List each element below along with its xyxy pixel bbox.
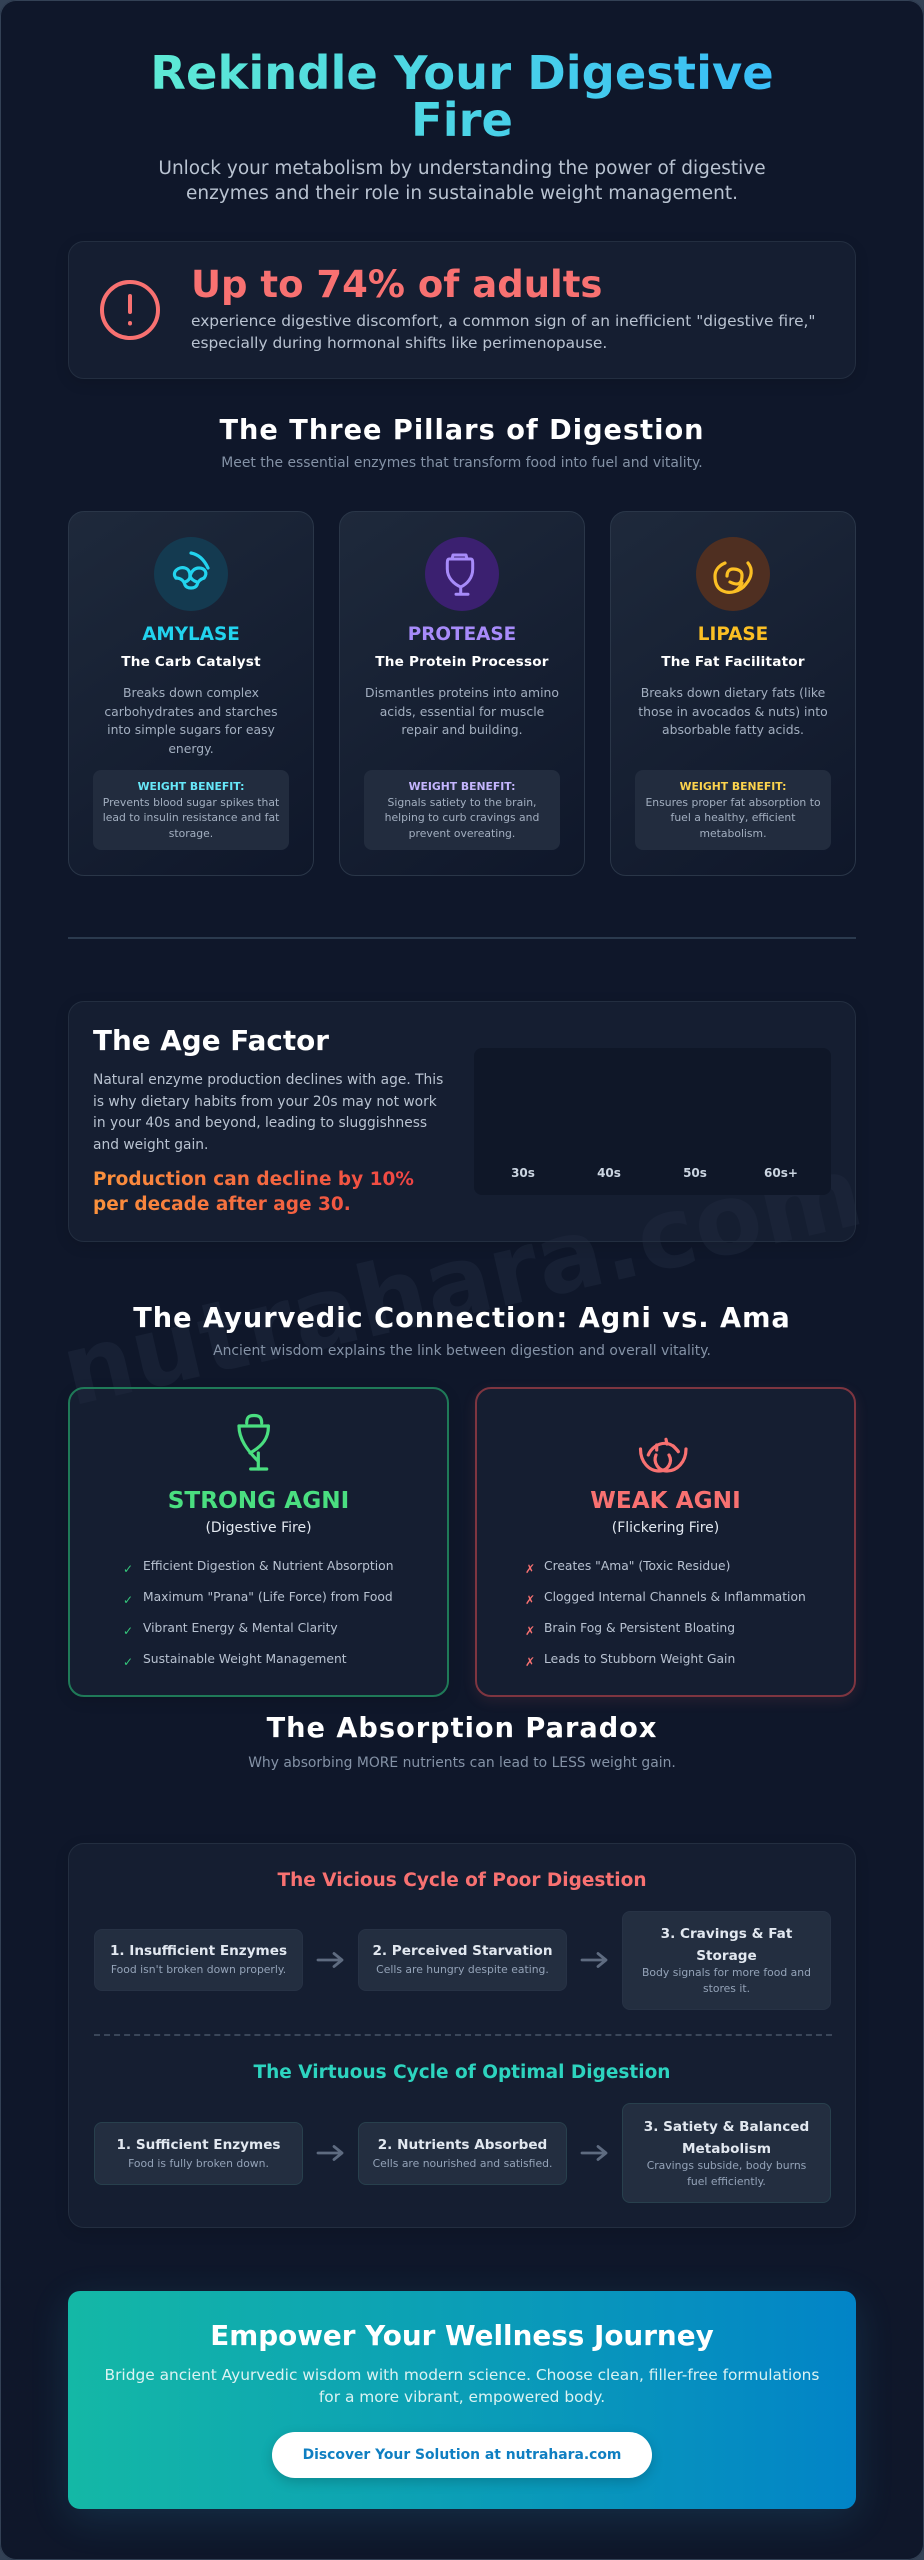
chart: enzyme decline by age: 30s bbox=[511, 1166, 535, 1180]
enzyme description: Breaks down complex bbox=[123, 685, 259, 700]
step: perceived starvation: Cells are hungry despite eating. bbox=[376, 1963, 549, 1976]
weight benefit: Ensures proper fat absorption to bbox=[645, 796, 821, 808]
panel: absorption cycles bbox=[68, 1843, 856, 2228]
age factor highlight bbox=[93, 1167, 414, 1217]
step: sufficient enzymes bbox=[94, 2122, 303, 2185]
subheading: ayurvedic connection: Ancient wisdom explains the link between digestion and overall vitality. bbox=[213, 1343, 711, 1359]
weak agni list: ✗ bbox=[525, 1562, 535, 1576]
step: satiety and balanced metabolism: Metabolism bbox=[682, 2140, 771, 2156]
enzyme description: carbohydrates and starches bbox=[104, 704, 278, 718]
heading: ayurvedic connection: The Ayurvedic Connection: Agni vs. Ama bbox=[133, 1303, 791, 1334]
weight benefit: Prevents blood sugar spikes that bbox=[103, 796, 279, 808]
weak agni list: Leads to Stubborn Weight Gain bbox=[544, 1652, 735, 1666]
statistic description bbox=[191, 312, 816, 352]
strong agni list: ✓ bbox=[123, 1624, 133, 1638]
strong agni list: ✓ bbox=[123, 1562, 133, 1576]
step: nutrients absorbed: 2. Nutrients Absorbed bbox=[378, 2137, 547, 2153]
call to action button bbox=[272, 2432, 652, 2478]
panel: amylase bbox=[68, 511, 314, 876]
weight benefit: prevent overeating. bbox=[409, 826, 515, 840]
enzyme name: AMYLASE bbox=[142, 624, 240, 645]
call to action heading: Empower Your Wellness Journey bbox=[210, 2319, 714, 2352]
step: insufficient enzymes bbox=[94, 1929, 303, 1991]
chart: enzyme decline by age: 60s+ bbox=[764, 1166, 798, 1180]
enzyme name: PROTEASE bbox=[408, 624, 516, 645]
step: nutrients absorbed: Cells are nourished and satisfied. bbox=[373, 2157, 552, 2170]
enzyme description: Dismantles proteins into amino bbox=[365, 685, 559, 700]
strong agni subtitle: (Digestive Fire) bbox=[205, 1520, 312, 1536]
subtitle: Unlock your metabolism by understanding the power of digestive bbox=[158, 158, 766, 179]
strong agni list: Sustainable Weight Management bbox=[143, 1652, 347, 1666]
vicious cycle heading: The Vicious Cycle of Poor Digestion bbox=[278, 1870, 646, 1891]
weight benefit bbox=[93, 770, 289, 850]
weight benefit: WEIGHT BENEFIT: bbox=[680, 780, 786, 793]
weak agni list: Creates "Ama" (Toxic Residue) bbox=[544, 1559, 730, 1573]
weak agni subtitle: (Flickering Fire) bbox=[612, 1520, 719, 1536]
statistic description: especially during hormonal shifts like perimenopause. bbox=[191, 334, 607, 352]
panel: lipase bbox=[610, 511, 856, 876]
statistic headline: Up to 74% of adults bbox=[191, 263, 602, 306]
arrow bbox=[580, 1952, 608, 1968]
call to action text: Bridge ancient Ayurvedic wisdom with modern science. Choose clean, filler-free formulations bbox=[105, 2366, 819, 2384]
chart: enzyme decline by age: 40s bbox=[597, 1166, 621, 1180]
title bbox=[144, 50, 780, 144]
chart: enzyme decline by age bbox=[474, 1048, 831, 1195]
enzyme description bbox=[365, 685, 559, 737]
strong agni list: ✓ bbox=[123, 1655, 133, 1669]
age factor highlight: Production can decline by 10% bbox=[93, 1169, 414, 1190]
age factor text: and weight gain. bbox=[93, 1137, 208, 1153]
enzyme description: repair and building. bbox=[401, 722, 523, 737]
step: satiety and balanced metabolism bbox=[622, 2103, 831, 2203]
weak agni list: ✗ bbox=[525, 1624, 535, 1638]
statistic description: experience digestive discomfort, a common sign of an inefficient "digestive fire," bbox=[191, 312, 816, 330]
enzyme name: LIPASE bbox=[698, 624, 768, 645]
weak agni list bbox=[525, 1559, 806, 1669]
watermark: nutrahara.com bbox=[52, 1135, 872, 1429]
weak agni list: ✗ bbox=[525, 1655, 535, 1669]
panel: protease bbox=[339, 511, 585, 876]
subtitle bbox=[158, 158, 766, 204]
weight benefit: lead to insulin resistance and fat bbox=[103, 811, 279, 824]
weak agni list: Clogged Internal Channels & Inflammation bbox=[544, 1590, 806, 1604]
enzyme description: Breaks down dietary fats (like bbox=[641, 685, 825, 700]
call to action text: for a more vibrant, empowered body. bbox=[319, 2388, 605, 2406]
panel: age factor bbox=[68, 1001, 856, 1242]
step: nutrients absorbed bbox=[358, 2122, 567, 2185]
strong agni title: STRONG AGNI bbox=[168, 1487, 349, 1514]
enzyme description bbox=[104, 685, 278, 756]
weak agni list: Brain Fog & Persistent Bloating bbox=[544, 1621, 735, 1635]
call to action button: Discover Your Solution at nutrahara.com bbox=[303, 2447, 621, 2463]
panel: weak agni bbox=[475, 1387, 856, 1697]
weak agni title: WEAK AGNI bbox=[590, 1487, 741, 1514]
age factor highlight: per decade after age 30. bbox=[93, 1194, 351, 1215]
weight benefit: WEIGHT BENEFIT: bbox=[138, 780, 244, 793]
strong agni list: Efficient Digestion & Nutrient Absorption bbox=[143, 1559, 394, 1573]
age factor text: Natural enzyme production declines with age. This bbox=[93, 1072, 443, 1088]
icon: lipase bbox=[696, 537, 770, 611]
enzyme description: acids, essential for muscle bbox=[380, 704, 544, 718]
step: perceived starvation bbox=[358, 1929, 567, 1991]
subheading: three pillars: Meet the essential enzymes that transform food into fuel and vitality. bbox=[221, 455, 703, 471]
icon: alert circle bbox=[100, 280, 160, 340]
weight benefit: WEIGHT BENEFIT: bbox=[409, 780, 515, 793]
title: Fire bbox=[411, 93, 513, 147]
strong agni list: Maximum "Prana" (Life Force) from Food bbox=[143, 1590, 393, 1604]
step: satiety and balanced metabolism: Cravings subside, body burns bbox=[647, 2159, 806, 2172]
call to action text bbox=[105, 2366, 819, 2406]
arrow bbox=[316, 1952, 344, 1968]
age factor heading: The Age Factor bbox=[93, 1024, 329, 1057]
age factor text: is why dietary habits from your 20s may not work bbox=[93, 1094, 437, 1110]
subtitle: enzymes and their role in sustainable weight management. bbox=[186, 183, 738, 204]
step: insufficient enzymes: Food isn't broken down properly. bbox=[111, 1963, 286, 1976]
icon: protease bbox=[425, 537, 499, 611]
step: cravings and fat storage: 3. Cravings & Fat bbox=[661, 1926, 792, 1942]
strong agni list: ✓ bbox=[123, 1593, 133, 1607]
panel: statistic callout bbox=[68, 241, 856, 379]
weight benefit: storage. bbox=[169, 826, 213, 840]
weight benefit: fuel a healthy, efficient bbox=[671, 811, 795, 824]
step: cravings and fat storage: stores it. bbox=[703, 1982, 750, 1994]
enzyme role: The Carb Catalyst bbox=[121, 654, 261, 670]
age factor text bbox=[93, 1072, 443, 1153]
enzyme role: The Protein Processor bbox=[375, 654, 549, 670]
enzyme role: The Fat Facilitator bbox=[661, 654, 805, 670]
step: insufficient enzymes: 1. Insufficient Enzymes bbox=[110, 1943, 287, 1959]
icon: strong agni bbox=[237, 1414, 270, 1471]
arrow bbox=[316, 2145, 344, 2161]
step: satiety and balanced metabolism: fuel efficiently. bbox=[687, 2174, 766, 2188]
panel: call to action bbox=[68, 2291, 856, 2509]
heading: three pillars: The Three Pillars of Digestion bbox=[219, 415, 705, 446]
step: cravings and fat storage: Storage bbox=[696, 1948, 757, 1964]
enzyme description: those in avocados & nuts) into bbox=[638, 704, 828, 718]
step: perceived starvation: 2. Perceived Starvation bbox=[372, 1943, 553, 1959]
strong agni list: Vibrant Energy & Mental Clarity bbox=[143, 1621, 338, 1635]
heading: absorption paradox: The Absorption Paradox bbox=[267, 1713, 657, 1744]
step: cravings and fat storage bbox=[622, 1911, 831, 2010]
weight benefit bbox=[364, 770, 560, 850]
step: cravings and fat storage: Body signals for more food and bbox=[642, 1966, 811, 1979]
weight benefit: Signals satiety to the brain, bbox=[387, 796, 536, 808]
step: sufficient enzymes: Food is fully broken down. bbox=[128, 2157, 269, 2170]
panel: strong agni bbox=[68, 1387, 449, 1697]
arrow bbox=[580, 2145, 608, 2161]
weak agni list: ✗ bbox=[525, 1593, 535, 1607]
age factor text: in your 40s and beyond, leading to sluggishness bbox=[93, 1115, 427, 1131]
weight benefit bbox=[635, 770, 831, 850]
enzyme description: energy. bbox=[168, 740, 214, 756]
title: Rekindle Your Digestive bbox=[150, 46, 774, 100]
subheading: absorption paradox: Why absorbing MORE nutrients can lead to LESS weight gain. bbox=[248, 1755, 676, 1771]
enzyme description: absorbable fatty acids. bbox=[662, 722, 804, 737]
virtuous cycle heading: The Virtuous Cycle of Optimal Digestion bbox=[254, 2062, 670, 2083]
icon: amylase bbox=[154, 537, 228, 611]
step: sufficient enzymes: 1. Sufficient Enzymes bbox=[116, 2137, 281, 2153]
enzyme description bbox=[638, 685, 828, 737]
enzyme description: into simple sugars for easy bbox=[107, 722, 275, 737]
step: satiety and balanced metabolism: 3. Satiety & Balanced bbox=[644, 2119, 809, 2135]
weight benefit: metabolism. bbox=[699, 826, 767, 840]
chart: enzyme decline by age: 50s bbox=[683, 1166, 707, 1180]
icon: weak agni bbox=[638, 1438, 688, 1473]
weight benefit: helping to curb cravings and bbox=[385, 811, 539, 824]
strong agni list bbox=[123, 1559, 394, 1669]
